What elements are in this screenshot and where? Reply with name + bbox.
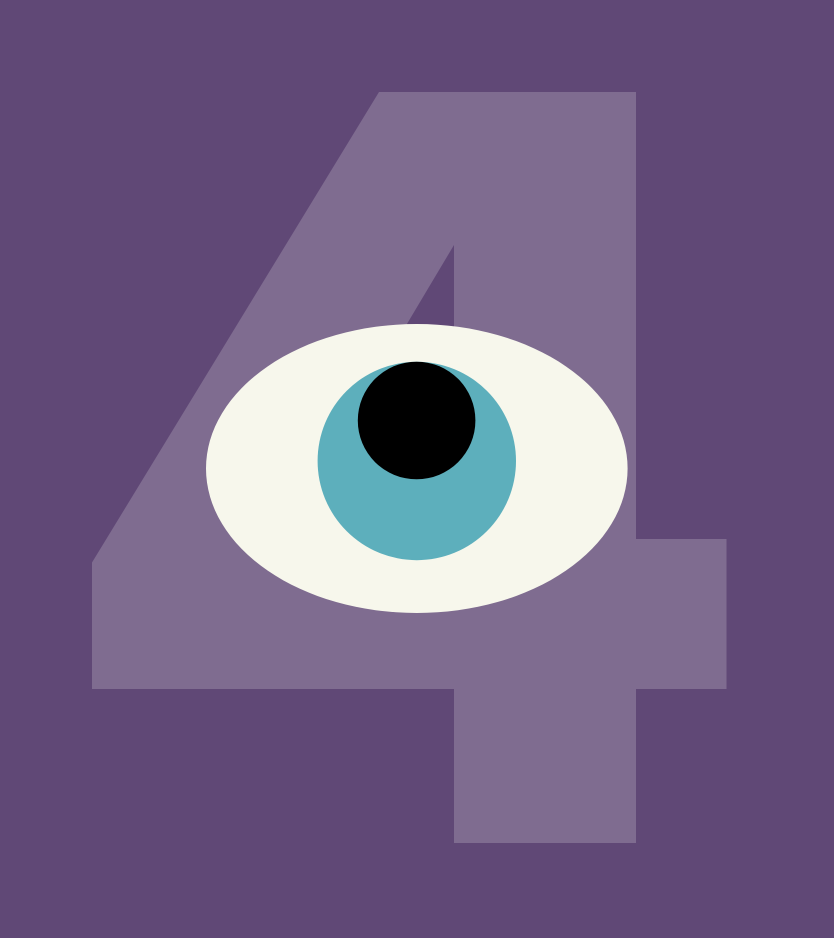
pupil [358,362,475,479]
eye white [206,324,628,613]
iris [318,362,516,560]
icon: eye [206,324,628,613]
numeral 4 shape [92,92,726,843]
